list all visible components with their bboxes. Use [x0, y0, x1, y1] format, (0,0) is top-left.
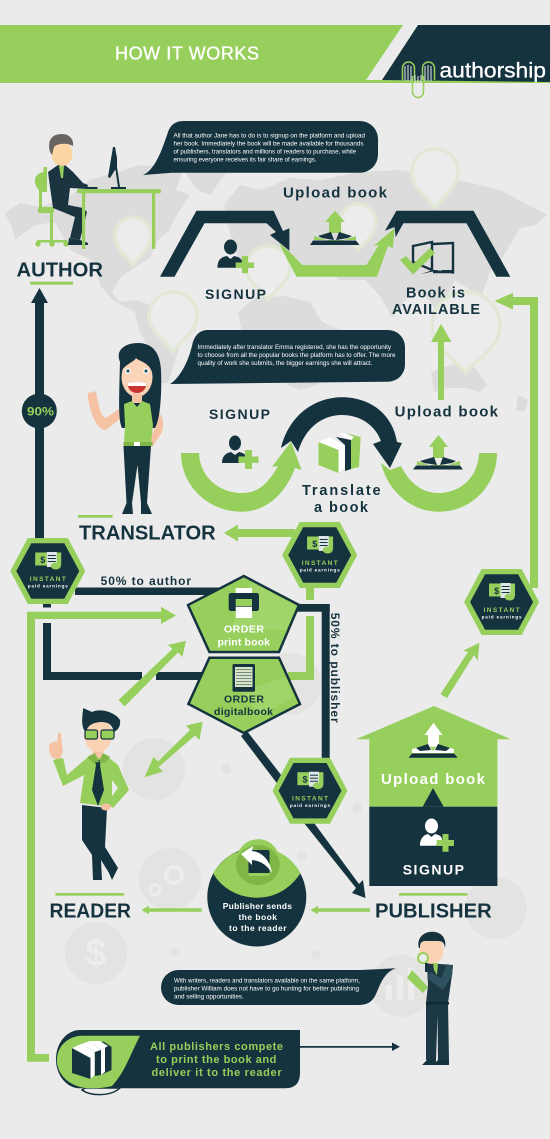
label: book is available: Book is	[406, 285, 465, 301]
author speech bubble: her book. Immediately the book will be made available for thousands	[174, 141, 364, 148]
publisher upload house	[356, 706, 511, 886]
hexagon: earnings translator: $	[312, 539, 317, 549]
publisher upload house: SIGNUP	[403, 861, 464, 877]
hexagon: earnings left: INSTANT	[30, 576, 66, 583]
translator flow: green left arc	[181, 442, 302, 512]
circle: publisher sends the book	[207, 839, 306, 946]
logo: authorship	[402, 60, 546, 98]
header banner	[0, 25, 550, 83]
label: translate a book: a book	[314, 500, 369, 516]
arrow: reader and digital order	[144, 722, 203, 777]
connector: dark flows	[43, 588, 366, 898]
hexagon: earnings publisher: paid earnings	[290, 803, 330, 808]
translator flow: green right arc	[381, 453, 497, 512]
callout: all publishers compete	[56, 1030, 300, 1095]
label: translate a book: Translate	[302, 483, 381, 499]
arrow: publisher to circle	[310, 906, 370, 914]
label: 50% to publisher: 50% to publisher	[328, 613, 342, 723]
label: translate a book	[302, 483, 381, 516]
connector: green flows	[27, 585, 314, 1062]
logo: authorship: authorship	[440, 60, 546, 82]
title: HOW IT WORKS	[115, 43, 259, 63]
translator figure	[88, 343, 163, 514]
icon: white signup person	[420, 818, 454, 852]
icon: stacked books	[72, 1041, 112, 1079]
hexagon: earnings left	[10, 538, 85, 604]
author speech bubble: of publishers, translators and millions of readers to purchase, while	[174, 149, 357, 156]
author speech bubble	[143, 121, 378, 175]
icon: books	[318, 433, 361, 473]
author flow: dark right band	[385, 211, 510, 277]
hexagon: earnings left: $	[40, 555, 45, 565]
translator speech bubble: Immediately after translator Emma registered, she has the opportunity	[198, 344, 392, 351]
heading: author: AUTHOR	[16, 259, 103, 282]
label: 50% to author: 50% to author	[101, 574, 191, 588]
hexagon: earnings translator: INSTANT	[302, 560, 338, 567]
arrow: publisher to earnings	[440, 643, 480, 698]
arrow: up to book available	[431, 324, 451, 400]
reader figure	[49, 708, 129, 880]
icon: signup person	[218, 240, 254, 273]
badge: 90%: 90%	[27, 405, 54, 419]
hexagon: earnings translator: paid earnings	[300, 567, 340, 572]
pentagon: order print book: ORDER	[224, 624, 264, 636]
pentagon: order digital book	[188, 658, 300, 733]
background icon circles	[65, 653, 527, 1017]
publisher speech bubble: publisher William does not have to go hunting for better publishing	[174, 986, 360, 993]
world map	[5, 160, 547, 412]
icon: upload book	[310, 211, 360, 245]
icon: white upload book	[409, 723, 458, 758]
hexagon: earnings right: paid earnings	[482, 614, 522, 619]
heading: publisher: PUBLISHER	[375, 900, 492, 922]
map location pins	[115, 149, 500, 373]
author figure	[35, 134, 161, 249]
circle: publisher sends the book: the book	[238, 912, 277, 922]
heading: reader: READER	[50, 900, 132, 922]
label: book is available: AVAILABLE	[392, 302, 480, 318]
publisher speech bubble: and selling opportunities.	[174, 994, 244, 1001]
circle: publisher sends the book: to the reader	[229, 923, 287, 933]
pentagon: order digital book: digitalbook	[214, 706, 273, 718]
hexagon: earnings right	[464, 569, 539, 635]
hexagon: earnings right: $	[494, 586, 499, 596]
translator flow: dark arc	[281, 397, 402, 468]
label: upload book: Upload book	[283, 184, 388, 201]
hexagon: earnings translator	[282, 522, 357, 588]
author flow: green arrow	[279, 228, 395, 277]
icon: translator upload book	[413, 435, 463, 470]
callout: all publishers compete: to print the book and	[156, 1054, 276, 1066]
translator speech bubble: to choose from all the popular books the platform has to offer. The more	[198, 352, 396, 359]
heading: translator: TRANSLATOR	[79, 522, 216, 544]
translator speech bubble	[170, 330, 405, 384]
arrow: circle to reader	[141, 906, 202, 914]
icon: tablet	[232, 664, 255, 692]
arrow: to translator	[224, 524, 295, 542]
pentagon: order digital book: ORDER	[224, 694, 264, 706]
hexagon: earnings publisher: INSTANT	[292, 796, 328, 803]
author speech bubble: ensuring everyone receives its fair share of earnings.	[174, 157, 317, 164]
icon: printer	[229, 588, 259, 618]
hexagon: earnings right: INSTANT	[484, 607, 520, 614]
icon: book with return arrow	[241, 846, 272, 876]
icon: book with check	[400, 242, 454, 274]
arrow: reader to print order	[118, 641, 186, 706]
arrow: green line to book available	[495, 293, 538, 588]
publisher figure	[407, 932, 453, 1065]
hexagon: earnings left: paid earnings	[28, 583, 68, 588]
label: translator signup: SIGNUP	[209, 406, 270, 422]
label: signup: SIGNUP	[205, 286, 266, 302]
badge: 90%	[22, 394, 57, 428]
arrow: to publisher	[300, 1042, 400, 1051]
label: translator upload book: Upload book	[395, 404, 499, 421]
author flow: dark left arrow	[160, 211, 289, 277]
callout: all publishers compete: deliver it to the reader	[152, 1067, 282, 1079]
publisher speech bubble	[161, 968, 396, 1005]
translator speech bubble: quality of work she submits, the bigger earnings she will attract.	[198, 360, 373, 367]
pentagon: order print book	[188, 576, 299, 652]
arrow: dark up to author	[31, 288, 48, 538]
hexagon: earnings publisher	[272, 758, 348, 824]
hexagon: earnings publisher: $	[302, 775, 308, 785]
pentagon: order print book: print book	[218, 637, 270, 649]
publisher upload house: Upload book	[381, 771, 486, 788]
callout: all publishers compete: All publishers compete	[150, 1041, 283, 1053]
publisher speech bubble: With writers, readers and translators available on the same platform,	[174, 978, 360, 985]
background icon circles: $	[85, 933, 107, 975]
label: book is available	[392, 285, 480, 318]
icon: translator signup person	[222, 436, 258, 469]
author speech bubble: All that author Jane has to do is to signup on the platform and upload	[174, 133, 366, 140]
circle: publisher sends the book: Publisher sends	[223, 901, 292, 911]
